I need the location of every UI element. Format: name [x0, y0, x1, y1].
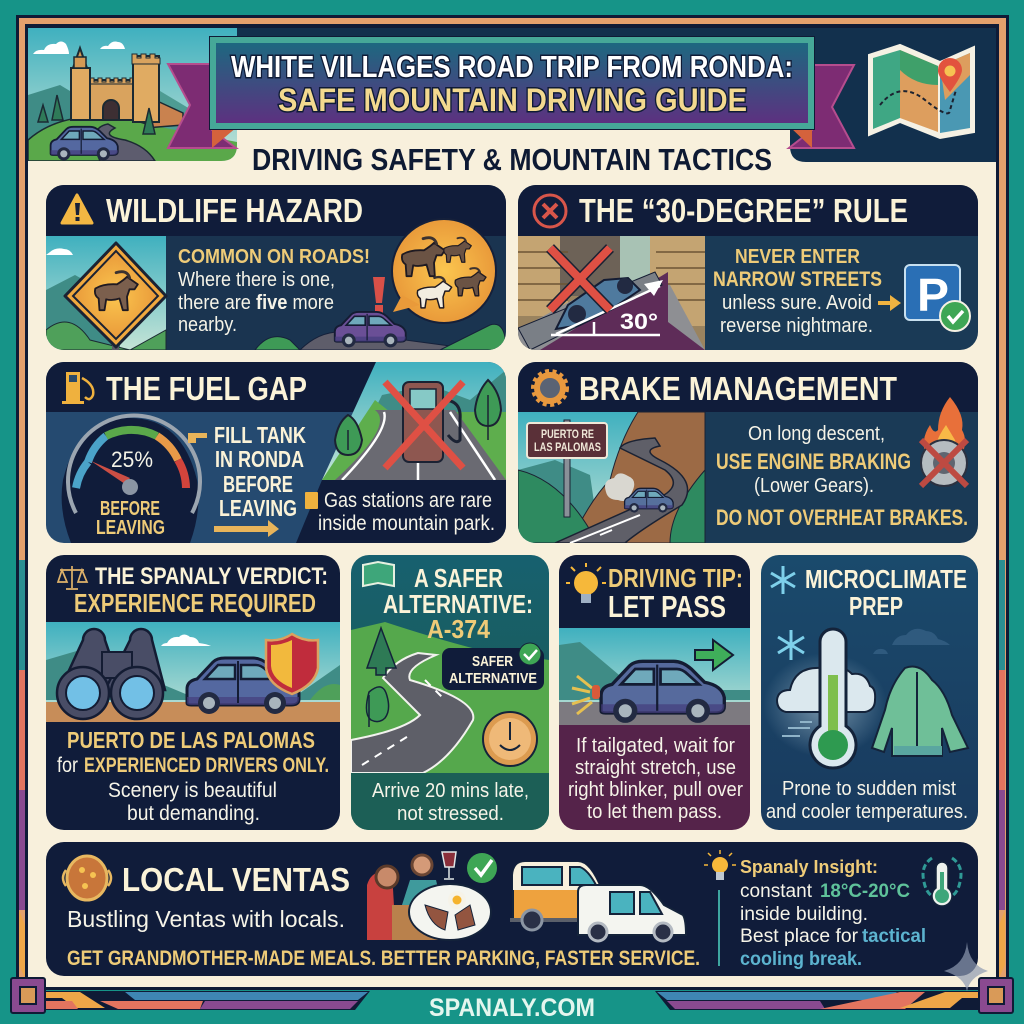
badge: safer alternative: [442, 643, 544, 690]
tip text: straight stretch, use: [575, 757, 736, 779]
decorative sparkle: [944, 942, 988, 992]
insight text: [740, 857, 926, 970]
tip text: If tailgated, wait for: [576, 735, 735, 757]
alternative text: [372, 782, 528, 820]
badge: safer alternative: ALTERNATIVE: [449, 670, 537, 687]
illustration: parked vans: [510, 862, 686, 941]
scene: road with crossed pump: [322, 362, 506, 480]
insight text: inside building.: [740, 904, 868, 925]
30-degree heading: THE “30-DEGREE” RULE: [579, 192, 908, 229]
verdict body: PUERTO DE LAS PALOMAS: [67, 727, 315, 753]
footer url: SPANALY.COM: [429, 994, 595, 1022]
alternative text: Arrive 20 mins late,: [372, 780, 529, 802]
verdict heading: [58, 563, 328, 618]
tip text: to let them pass.: [587, 801, 722, 823]
panel: safer alternative: [351, 555, 549, 830]
alternative heading: A-374: [427, 614, 490, 644]
tip text: right blinker, pull over: [568, 779, 743, 801]
insight text: Best place for: [740, 926, 859, 947]
fuel gauge: 25%: [111, 447, 153, 472]
microclimate heading: MICROCLIMATE: [805, 564, 967, 594]
icon: light bulb: [704, 850, 736, 880]
wildlife text: COMMON ON ROADS!: [178, 246, 370, 268]
icon: paella pan: [63, 856, 111, 900]
scene: mountain descent: PUERTO RE: [541, 429, 594, 441]
panel: verdict: [46, 555, 340, 830]
verdict body: EXPERIENCED DRIVERS ONLY.: [84, 754, 329, 777]
30-degree text: NARROW STREETS: [713, 268, 882, 291]
panel: fuel gap: [46, 362, 506, 543]
microclimate text: and cooler temperatures.: [766, 801, 968, 823]
divider: [718, 890, 720, 966]
wildlife text: there are five more: [178, 292, 334, 314]
brake text: (Lower Gears).: [754, 475, 874, 497]
panel: 30-degree rule: [518, 185, 978, 350]
arrow to parking: [878, 295, 901, 311]
icon: exclamation mark: [373, 277, 385, 313]
tip text: [568, 735, 743, 823]
alternative heading: ALTERNATIVE:: [383, 589, 533, 619]
bottom-right note: Gas stations are rare: [324, 489, 492, 512]
icon: thermometer with ornaments: [923, 858, 961, 906]
brake text: On long descent,: [748, 423, 885, 445]
bottom-right note: [296, 480, 506, 543]
verdict body: [57, 727, 329, 825]
microclimate text: [766, 778, 968, 823]
icon: overheated brake disc: [921, 397, 967, 486]
fill tank instruction: [188, 422, 306, 537]
brake heading: BRAKE MANAGEMENT: [579, 370, 897, 407]
bottom ornaments: [11, 978, 1013, 1013]
insight text: tactical: [862, 926, 926, 947]
fuel gauge: BEFORE: [100, 498, 160, 520]
brake text: [716, 423, 968, 530]
scene: road and purple car: [255, 312, 506, 350]
alternative text: not stressed.: [397, 803, 504, 825]
verdict body: for: [57, 754, 78, 777]
scene: mountain descent: [518, 412, 705, 543]
panel: wildlife hazard: [46, 185, 506, 352]
fuel gauge: LEAVING: [96, 517, 165, 539]
30-degree text: unless sure. Avoid: [722, 292, 872, 314]
tip heading: [566, 563, 741, 618]
ventas text: Bustling Ventas with locals.: [67, 906, 345, 932]
illustration: thermometer, cloud, jacket: [763, 629, 968, 768]
scene: car pulling over: [559, 628, 750, 725]
30-degree text: [713, 246, 882, 337]
ventas tagline: GET GRANDMOTHER-MADE MEALS. BETTER PARKING, FASTER SERVICE.: [67, 947, 700, 970]
wildlife heading: [60, 193, 362, 224]
brake text: USE ENGINE BRAKING: [716, 449, 911, 474]
section heading: DRIVING SAFETY & MOUNTAIN TACTICS: [252, 142, 772, 177]
scene: winding road: [351, 622, 549, 773]
insight text: cooling break.: [740, 949, 862, 970]
panel: brake management: [518, 362, 978, 543]
ribbon tails: [168, 64, 854, 148]
ventas heading: LOCAL VENTAS: [122, 861, 350, 898]
verdict heading: THE SPANALY VERDICT:: [95, 563, 328, 590]
fill tank instruction: BEFORE: [223, 471, 293, 497]
icon: folded map: [869, 45, 974, 138]
fuel heading: [62, 372, 306, 404]
scene: road sign: [46, 236, 166, 352]
title line 1: WHITE VILLAGES ROAD TRIP FROM RONDA:: [231, 49, 793, 84]
header dark band: [226, 28, 996, 162]
panel: local ventas: [46, 842, 978, 976]
illustration: diners and meal: [367, 852, 497, 940]
alternative heading: A SAFER: [414, 563, 503, 593]
30-degree text: NEVER ENTER: [735, 246, 860, 268]
title line 2: SAFE MOUNTAIN DRIVING GUIDE: [278, 82, 747, 118]
insight text: Spanaly Insight:: [740, 857, 878, 877]
30-degree text: reverse nightmare.: [720, 315, 873, 337]
icon: parking with check: [905, 265, 970, 331]
panel: driving tip: [559, 555, 750, 830]
icon: parking with check: P: [917, 269, 949, 321]
wildlife text: Where there is one,: [178, 269, 335, 291]
microclimate heading: PREP: [849, 591, 903, 621]
illustration: castle and car: [28, 28, 237, 161]
fill tank instruction: IN RONDA: [215, 446, 304, 472]
fuel gauge: [62, 416, 200, 543]
badge: safer alternative: SAFER: [472, 653, 513, 670]
insight text: 18°C-20°C: [820, 881, 910, 902]
tip heading: DRIVING TIP:: [608, 563, 743, 593]
scene: steep narrow street: 30°: [620, 309, 658, 334]
fill tank instruction: FILL TANK: [214, 422, 306, 448]
panel: microclimate prep: [761, 555, 978, 830]
verdict body: but demanding.: [127, 802, 260, 825]
alternative heading: [363, 562, 533, 644]
microclimate text: Prone to sudden mist: [782, 778, 956, 800]
wildlife text: [178, 246, 370, 336]
brake text: DO NOT OVERHEAT BRAKES.: [716, 505, 968, 530]
microclimate heading: [771, 564, 967, 621]
wildlife text: nearby.: [178, 314, 237, 336]
insight text: constant: [740, 881, 813, 902]
verdict heading: EXPERIENCE REQUIRED: [74, 588, 316, 618]
scene: mountain descent: LAS PALOMAS: [534, 442, 601, 454]
verdict body: Scenery is beautiful: [108, 779, 277, 802]
scene: binoculars, car and shield: [46, 622, 340, 722]
tip heading: LET PASS: [608, 589, 726, 624]
wildlife heading: WILDLIFE HAZARD: [106, 192, 363, 229]
title banner: [209, 36, 815, 130]
fuel heading: THE FUEL GAP: [106, 370, 307, 407]
speech bubble with goats: [392, 219, 496, 323]
scene: steep narrow street: [518, 236, 705, 350]
fill tank instruction: LEAVING: [219, 495, 297, 521]
bottom-right note: inside mountain park.: [318, 512, 495, 535]
